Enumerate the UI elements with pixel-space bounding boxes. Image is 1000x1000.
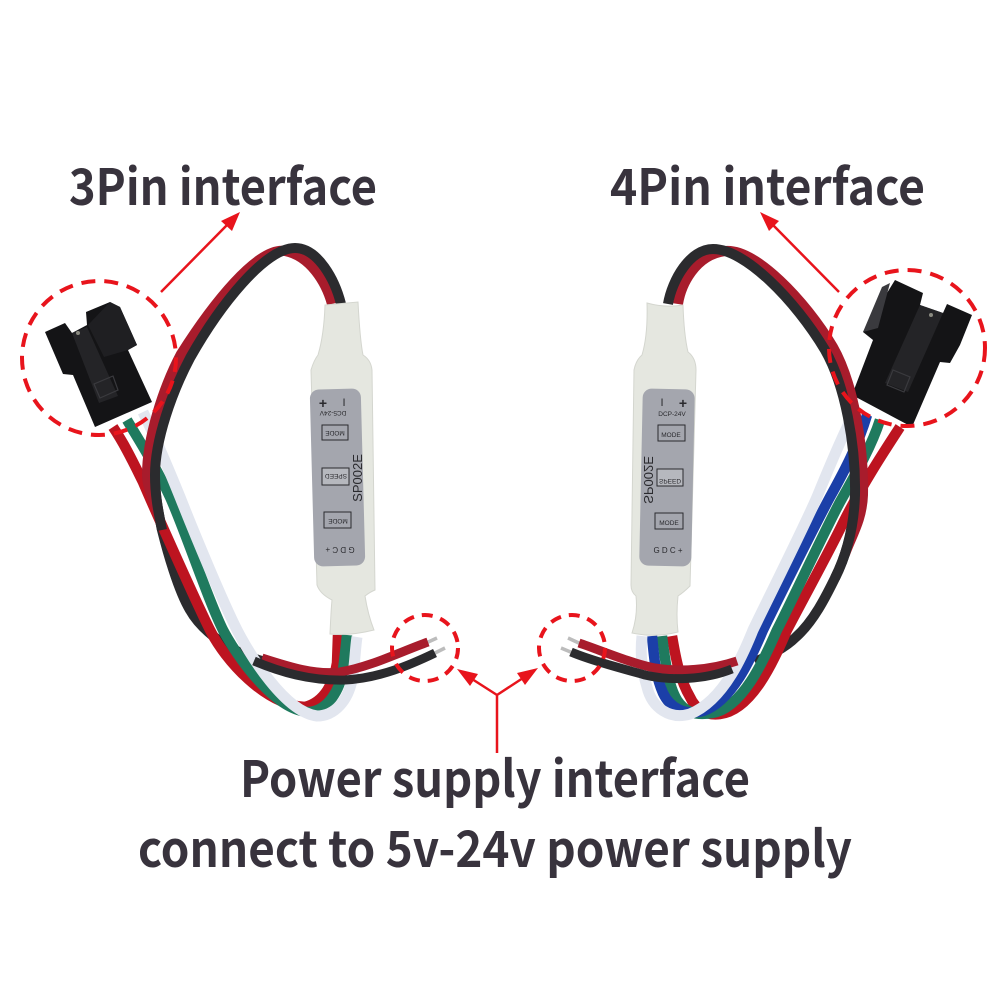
right signal wires: red, green, blue, white (641, 407, 900, 716)
right controller label plate: MODE (661, 432, 681, 439)
callout circle: right power tips (539, 615, 605, 681)
right controller label plate: DCP-24V (658, 411, 686, 418)
left controller label plate: MODE (325, 429, 345, 436)
right controller body (631, 303, 696, 635)
right lower black wire (755, 495, 855, 662)
right controller label plate: + (679, 395, 687, 411)
left controller label plate: G D C + (325, 545, 355, 554)
caption: connect to power supply: connect to 5v-24v power supply (138, 810, 852, 882)
right controller label plate (639, 388, 695, 567)
left controller label plate: MODE (328, 517, 348, 524)
left controller label plate: DC5-24V (319, 409, 346, 416)
left power wires with tips (254, 638, 445, 680)
left controller label plate (310, 388, 365, 567)
left controller label plate: + (319, 395, 327, 411)
callout circle: right connector (829, 270, 985, 426)
right controller label plate: I (660, 397, 664, 409)
left 3-pin connector (45, 302, 152, 427)
arrow: to 3Pin interface (161, 212, 240, 292)
right controller assembly (561, 249, 972, 716)
arrow: to 4Pin interface (760, 212, 839, 292)
right red and black supply wires, upper loop (668, 249, 863, 578)
left controller label plate: I (342, 397, 346, 409)
left controller assembly (45, 248, 445, 716)
caption: power supply interface: Power supply interface (240, 740, 750, 812)
left controller label plate: SPEED (325, 472, 347, 479)
left controller label plate: SP002E (350, 454, 365, 502)
heading: 3Pin interface: 3Pin interface (69, 148, 377, 220)
left lower black wire (155, 475, 262, 661)
right power wires with tips (561, 638, 737, 679)
right controller label plate: SPEED (659, 477, 681, 484)
left controller body (311, 302, 375, 634)
heading: 4Pin interface: 4Pin interface (610, 148, 925, 220)
left signal wires: red, green, white (113, 412, 357, 716)
right controller label plate: MODE (659, 520, 679, 527)
callout circle: left connector (22, 281, 176, 435)
right controller label plate: SP002E (641, 456, 656, 504)
forked arrow: to power tips (457, 668, 538, 753)
callout circle: left power tips (392, 615, 458, 681)
right controller label plate: G D C + (653, 546, 683, 555)
right 4-pin connector (852, 280, 972, 427)
left red and black supply wires, upper loop (147, 248, 341, 530)
